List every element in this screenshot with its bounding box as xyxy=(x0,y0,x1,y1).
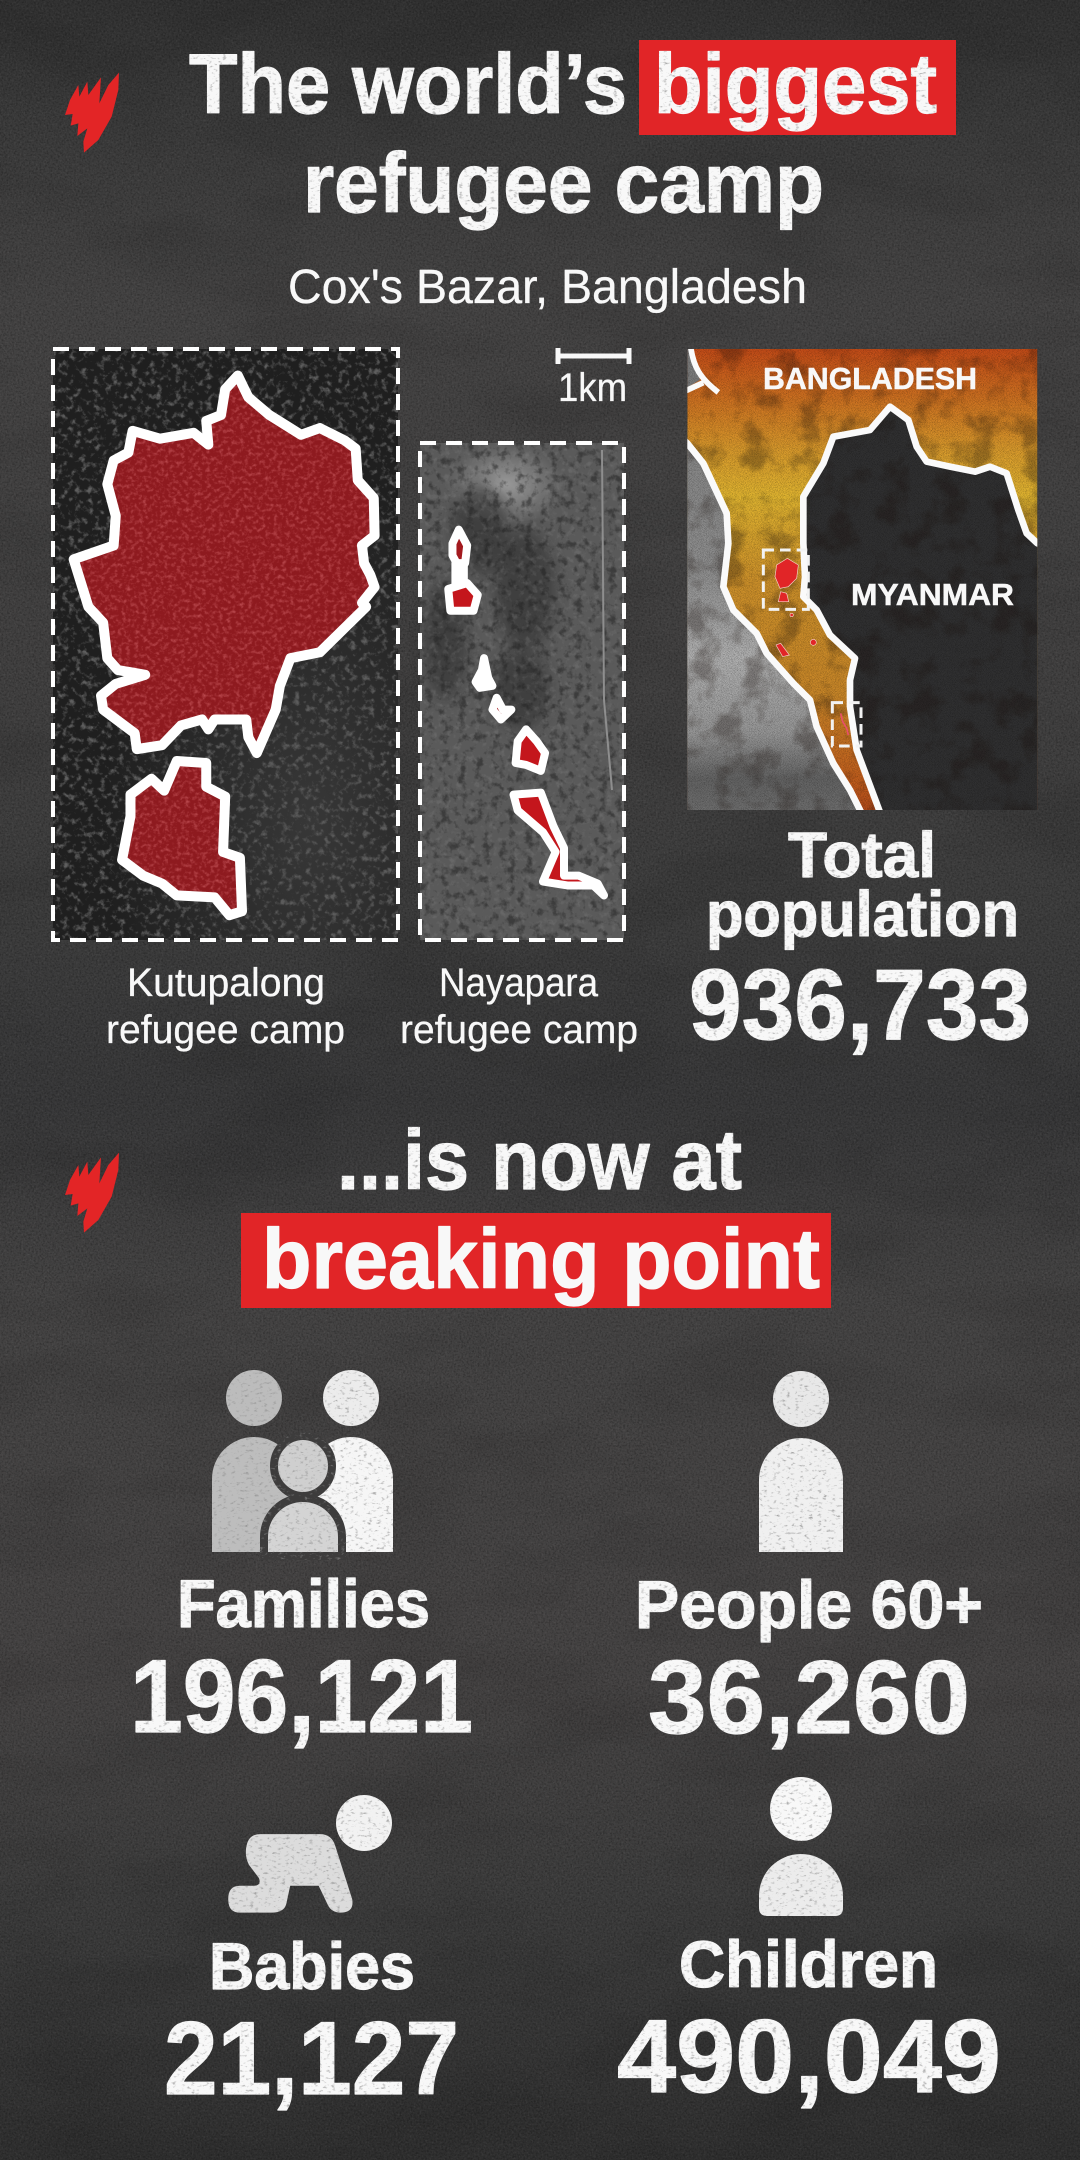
subtitle: Cox's Bazar, Bangladesh xyxy=(288,261,807,314)
caption: Kutupalong: refugee camp xyxy=(106,1008,345,1052)
stat: children xyxy=(617,1927,1001,2115)
border line xyxy=(803,407,1047,817)
icon: child xyxy=(759,1777,843,1916)
scale bar: 1km: 1km xyxy=(558,366,627,410)
stat: babies xyxy=(164,1929,459,2117)
caption: Nayapara: refugee camp xyxy=(400,1008,638,1052)
stat: babies: 21,127 xyxy=(164,2001,459,2117)
logo: SBS mark top xyxy=(65,73,119,153)
stat: people 60+ xyxy=(635,1567,983,1756)
caption: Kutupalong xyxy=(106,961,345,1052)
stat: total population: Total xyxy=(788,819,936,891)
camp: Kutupalong south xyxy=(122,761,242,915)
label: Bangladesh: BANGLADESH xyxy=(763,361,977,396)
logo: SBS mark middle xyxy=(65,1153,119,1233)
title line one: The world’s xyxy=(189,37,627,131)
caption: Nayapara: Nayapara xyxy=(439,961,599,1005)
stat: families xyxy=(130,1566,473,1755)
mini camps xyxy=(775,558,848,735)
stat: total population: 936,733 xyxy=(689,949,1031,1061)
river notch xyxy=(686,347,718,392)
stat: children: Children xyxy=(679,1927,938,2001)
mini dashed frames xyxy=(763,550,861,746)
stat: families: Families xyxy=(177,1566,430,1642)
stat: total population: population xyxy=(706,878,1019,950)
camp shapes: Nayapara xyxy=(448,530,604,895)
stat: total population xyxy=(689,819,1031,1061)
stat: families: 196,121 xyxy=(130,1639,473,1755)
title xyxy=(189,37,937,230)
camp: Kutupalong main xyxy=(74,375,375,753)
panel: Kutupalong satellite map xyxy=(53,349,398,940)
land: Bangladesh xyxy=(687,349,1037,810)
dashed frame xyxy=(420,443,624,940)
title word: biggest: biggest xyxy=(654,37,937,131)
sea xyxy=(687,444,856,810)
stat: babies: Babies xyxy=(209,1929,415,2003)
caption: Nayapara xyxy=(400,961,638,1052)
label: Myanmar: MYANMAR xyxy=(851,577,1014,612)
dashed frame xyxy=(53,349,398,940)
stat: children: 490,049 xyxy=(617,1999,1001,2115)
panel: location map xyxy=(680,347,1047,817)
icon: family xyxy=(212,1370,393,1556)
heading: is now at: ...is now at xyxy=(337,1113,742,1207)
highlight box: biggest xyxy=(639,40,956,135)
title line two: refugee camp xyxy=(303,136,824,230)
panel: Nayapara satellite map xyxy=(420,443,624,940)
caption: Kutupalong: Kutupalong xyxy=(127,961,325,1005)
scale bar: 1km xyxy=(558,348,629,410)
icon: baby xyxy=(228,1795,392,1913)
stat: people 60+: 36,260 xyxy=(648,1640,970,1756)
stat: people 60+: People 60+ xyxy=(635,1567,983,1643)
highlight: breaking point: breaking point xyxy=(262,1212,820,1306)
Myanmar xyxy=(803,407,1047,817)
coast line xyxy=(680,437,863,817)
icon: older person xyxy=(759,1371,843,1552)
